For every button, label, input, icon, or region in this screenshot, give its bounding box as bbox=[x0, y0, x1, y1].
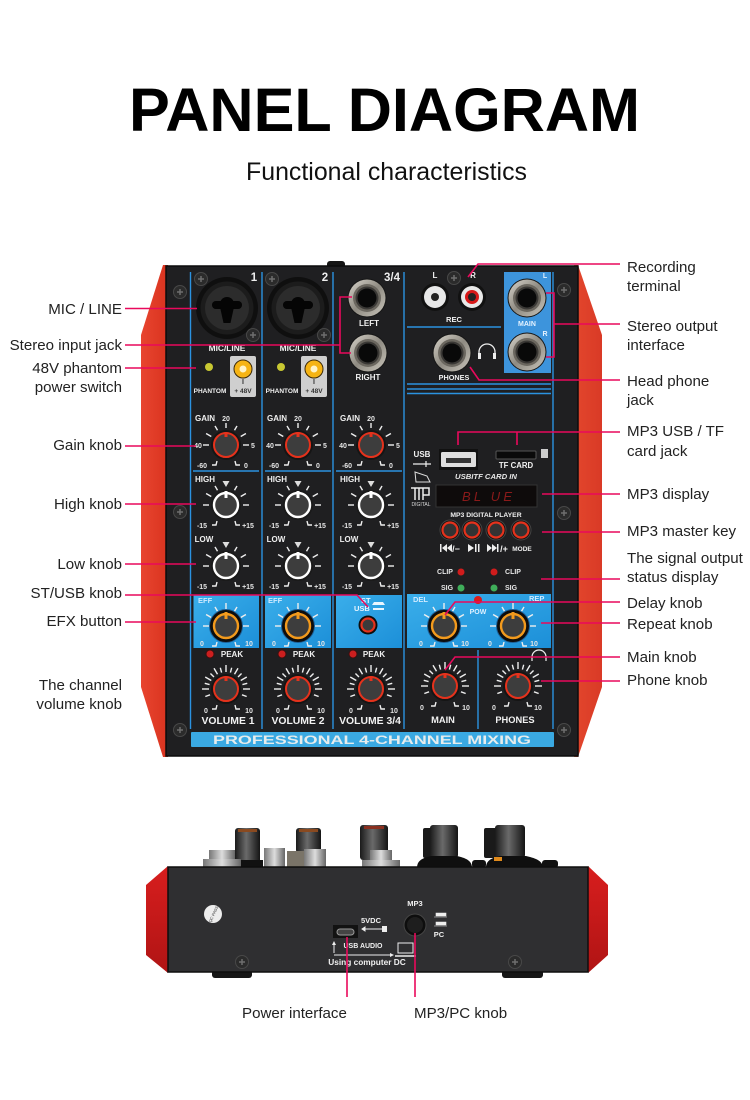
gain knob 3/4: 40 bbox=[339, 443, 347, 450]
channel numbers bbox=[251, 272, 401, 284]
low knob 3/4: LOW bbox=[340, 535, 359, 544]
callout: Phone knob: Phone knob bbox=[627, 672, 708, 689]
phantom power channel 1: I bbox=[242, 379, 244, 386]
callout: Recording terminal: Recording bbox=[627, 259, 696, 276]
callout: MP3/PC knob: MP3/PC knob bbox=[414, 1005, 507, 1022]
ST/USB panel: ST bbox=[361, 596, 371, 605]
EFF panel 1 bbox=[194, 595, 259, 648]
callout: Main knob: Main knob bbox=[627, 649, 697, 666]
callout: channel volume knob: volume knob bbox=[36, 696, 122, 713]
callout: channel volume knob bbox=[36, 677, 122, 713]
volume knob 1: 10 bbox=[245, 708, 253, 715]
callout: Recording terminal: terminal bbox=[627, 278, 681, 295]
callout: Head phone jack: jack bbox=[626, 392, 654, 409]
callout: MP3 display: MP3 display bbox=[627, 486, 710, 503]
volume labels bbox=[201, 715, 535, 727]
MP3 player keys: MODE bbox=[512, 546, 532, 553]
callout: Power interface: Power interface bbox=[242, 1005, 347, 1022]
high knob 1: -15 bbox=[197, 523, 207, 530]
main output panel: MAIN bbox=[518, 321, 536, 328]
delay and repeat panel bbox=[407, 594, 551, 648]
volume labels: VOLUME 3/4 bbox=[339, 716, 401, 727]
volume knob 1 bbox=[202, 665, 253, 715]
EFF panel 2: 0 bbox=[272, 641, 276, 648]
micro USB port bbox=[333, 925, 358, 938]
callout: signal output status display: The signal output bbox=[627, 550, 744, 567]
callout: High knob: High knob bbox=[54, 496, 122, 513]
callout: Stereo output interface bbox=[546, 293, 718, 357]
EFF panel 1: EFF bbox=[198, 596, 213, 605]
gain knob 2: 0 bbox=[316, 463, 320, 470]
MP3 player keys: /− bbox=[452, 544, 460, 554]
EFF panel 1: 10 bbox=[245, 641, 253, 648]
rear red right cheek bbox=[588, 866, 608, 973]
high knob 2: +15 bbox=[314, 523, 326, 530]
delay and repeat panel: DEL bbox=[413, 595, 428, 604]
EFF panel 2 bbox=[265, 595, 331, 648]
bottom banner bbox=[191, 732, 554, 747]
MP3 digital logo bbox=[411, 488, 431, 508]
peak LEDs and labels: PEAK bbox=[221, 650, 243, 659]
phantom power channel 2 bbox=[266, 356, 327, 397]
phones knob: 10 bbox=[534, 705, 542, 712]
gain knob 2: 5 bbox=[323, 443, 327, 450]
left and right line jacks: RIGHT bbox=[356, 373, 381, 382]
low knob 3/4: -15 bbox=[342, 584, 352, 591]
REC RCA terminals bbox=[421, 271, 486, 324]
main output panel: L bbox=[543, 273, 548, 280]
phones knob: 0 bbox=[492, 705, 496, 712]
callout: Stereo input jack: Stereo input jack bbox=[10, 337, 122, 354]
callout: signal output status display bbox=[541, 550, 744, 586]
high knob 2: -15 bbox=[269, 523, 279, 530]
5VDC marking: 5VDC bbox=[361, 916, 382, 925]
red right side cheek bbox=[574, 265, 602, 757]
high knob 1 bbox=[195, 475, 254, 530]
gain knob 1 bbox=[194, 414, 255, 470]
callout: Main knob bbox=[445, 649, 697, 670]
headphone icon bbox=[532, 650, 546, 661]
rear screws bbox=[236, 956, 522, 968]
computer DC caption: Using computer DC bbox=[328, 957, 406, 967]
left and right line jacks bbox=[348, 278, 388, 382]
callout: signal output status display: status display bbox=[627, 569, 719, 586]
USB audio marking bbox=[332, 941, 416, 957]
phantom power channel 2: PHANTOM bbox=[266, 388, 298, 395]
volume knob 2: 10 bbox=[317, 708, 325, 715]
high knob 3/4: +15 bbox=[387, 523, 399, 530]
mixer top panel bbox=[141, 261, 602, 757]
callout: MP3 USB / TF card jack: card jack bbox=[627, 443, 688, 460]
phantom power channel 2: I bbox=[313, 379, 315, 386]
low knob 1 bbox=[195, 535, 254, 591]
REC RCA terminals: R bbox=[470, 271, 476, 280]
MP3 player keys bbox=[440, 512, 532, 554]
gain knob 1: -60 bbox=[197, 463, 207, 470]
callout: Gain knob: Gain knob bbox=[53, 437, 122, 454]
gain knob 3/4: GAIN bbox=[340, 414, 360, 423]
delay and repeat panel: 10 bbox=[461, 641, 469, 648]
clip and signal LEDs: CLIP bbox=[437, 569, 453, 576]
ST/USB panel bbox=[336, 595, 402, 648]
callout: MP3 master key: MP3 master key bbox=[627, 523, 736, 540]
low knob 2: -15 bbox=[269, 584, 279, 591]
rear feet bbox=[212, 970, 543, 978]
callout: MP3/PC knob bbox=[414, 933, 507, 1022]
callout: ST/USB knob bbox=[31, 585, 368, 607]
volume labels: MAIN bbox=[431, 715, 455, 725]
delay and repeat panel: POW bbox=[470, 609, 487, 616]
MP3 display bbox=[436, 485, 537, 507]
QC sticker: QC PASS bbox=[207, 905, 220, 923]
rear black body bbox=[168, 867, 588, 972]
gain knob 2 bbox=[266, 414, 327, 470]
volume knob 1: 0 bbox=[204, 708, 208, 715]
volume knob 3/4 bbox=[347, 665, 398, 715]
delay and repeat panel: 0 bbox=[419, 641, 423, 648]
low knob 1: -15 bbox=[197, 584, 207, 591]
callout: Stereo input jack bbox=[10, 297, 352, 354]
MP3/PC switch bbox=[404, 899, 447, 939]
volume labels: VOLUME 2 bbox=[271, 716, 325, 727]
low knob 1: +15 bbox=[242, 584, 254, 591]
MP3 display: BL UE bbox=[462, 489, 512, 504]
EFF panel 2: 10 bbox=[317, 641, 325, 648]
USB port bbox=[413, 449, 478, 482]
high knob 3/4: HIGH bbox=[340, 475, 360, 484]
gain knob 2: -60 bbox=[269, 463, 279, 470]
REC RCA terminals: L bbox=[433, 271, 438, 280]
clip and signal LEDs: SIG bbox=[441, 585, 454, 592]
high knob 3/4 bbox=[340, 475, 399, 530]
high knob 1: HIGH bbox=[195, 475, 215, 484]
callout: MP3 USB / TF card jack: MP3 USB / TF bbox=[627, 423, 724, 440]
gain knob 2: 20 bbox=[294, 416, 302, 423]
gain knob 1: 20 bbox=[222, 416, 230, 423]
clip and signal LEDs bbox=[437, 568, 521, 592]
low knob 1: LOW bbox=[195, 535, 214, 544]
EFF panel 1: 0 bbox=[200, 641, 204, 648]
phantom power channel 2: + 48V bbox=[305, 388, 323, 395]
gain knob 3/4 bbox=[339, 414, 400, 470]
main output panel: R bbox=[542, 331, 548, 338]
volume knob 2: 0 bbox=[276, 708, 280, 715]
USB audio marking: USB AUDIO bbox=[343, 943, 383, 950]
callout: Stereo output interface: Stereo output bbox=[627, 318, 718, 335]
gain knob 3/4: 5 bbox=[396, 443, 400, 450]
callout: Recording terminal bbox=[468, 259, 696, 295]
rear red left cheek bbox=[146, 866, 168, 973]
top connector bump bbox=[327, 261, 345, 268]
gain knob 3/4: 0 bbox=[389, 463, 393, 470]
XLR jack 2 bbox=[266, 272, 330, 342]
MP3/PC switch: MP3 bbox=[407, 899, 423, 908]
MP3/PC switch: PC bbox=[434, 930, 445, 939]
phones knob bbox=[492, 662, 542, 712]
5VDC marking bbox=[361, 916, 387, 932]
gain knob 3/4: 20 bbox=[367, 416, 375, 423]
gain knob 2: GAIN bbox=[267, 414, 287, 423]
callout: MP3 USB / TF card jack bbox=[458, 423, 724, 460]
phantom power channel 1: PHANTOM bbox=[194, 388, 226, 395]
low knob 3/4: +15 bbox=[387, 584, 399, 591]
blue channel dividers bbox=[190, 272, 553, 729]
MP3 player keys: MP3 DIGITAL PLAYER bbox=[450, 512, 522, 519]
gain knob 1: 40 bbox=[194, 443, 202, 450]
main knob: 10 bbox=[462, 705, 470, 712]
volume knob 2 bbox=[274, 665, 325, 715]
volume knob 3/4: 10 bbox=[390, 708, 398, 715]
channel numbers: 3/4 bbox=[384, 272, 401, 284]
red left side cheek bbox=[141, 265, 168, 757]
high knob 2 bbox=[267, 475, 326, 530]
callout: EFX button: EFX button bbox=[46, 613, 122, 630]
volume labels: PHONES bbox=[495, 715, 535, 725]
callout: Power interface bbox=[242, 937, 347, 1022]
bottom banner: PROFESSIONAL 4-CHANNEL MIXING bbox=[213, 733, 531, 747]
low knob 3/4 bbox=[340, 535, 399, 591]
callout: MIC / LINE: MIC / LINE bbox=[48, 301, 122, 318]
clip and signal LEDs: SIG bbox=[505, 585, 518, 592]
USB/TF caption: USBITF CARD IN bbox=[455, 472, 517, 481]
MIC/LINE labels: MIC/LINE bbox=[209, 343, 246, 353]
TF card slot bbox=[496, 449, 548, 470]
callout: 48V phantom power switch: 48V phantom bbox=[32, 360, 122, 377]
peak LEDs and labels bbox=[206, 650, 385, 659]
MP3 digital logo: DIGITAL bbox=[411, 502, 431, 508]
gain knob 1: 0 bbox=[244, 463, 248, 470]
MIC/LINE labels bbox=[209, 343, 317, 353]
title: PANEL DIAGRAM bbox=[129, 76, 640, 144]
ST/USB panel: USB bbox=[354, 604, 370, 613]
callout: Low knob: Low knob bbox=[57, 556, 122, 573]
corner screws bbox=[174, 284, 570, 736]
QC sticker bbox=[204, 905, 222, 923]
delay and repeat panel: 0 bbox=[488, 641, 492, 648]
MIC/LINE labels: MIC/LINE bbox=[280, 343, 317, 353]
low knob 2: +15 bbox=[314, 584, 326, 591]
channel numbers: 2 bbox=[322, 272, 328, 284]
gain knob 2: 40 bbox=[266, 443, 274, 450]
gain knob 3/4: -60 bbox=[342, 463, 352, 470]
callout: Low knob bbox=[57, 556, 196, 573]
callout: 48V phantom power switch bbox=[32, 360, 196, 396]
peak LEDs and labels: PEAK bbox=[363, 650, 385, 659]
XLR jack 1 bbox=[194, 272, 260, 342]
callout: channel volume knob: The channel bbox=[39, 677, 122, 694]
callout: 48V phantom power switch: power switch bbox=[35, 379, 122, 396]
callout: ST/USB knob: ST/USB knob bbox=[31, 585, 122, 602]
gain knob 1: GAIN bbox=[195, 414, 215, 423]
EFF panel 2: EFF bbox=[268, 596, 283, 605]
volume knob 3/4: 0 bbox=[349, 708, 353, 715]
main knob bbox=[420, 662, 470, 712]
low knob 2 bbox=[267, 535, 326, 591]
high knob 1: +15 bbox=[242, 523, 254, 530]
MP3 player keys: /+ bbox=[500, 544, 508, 554]
TF card slot: TF CARD bbox=[499, 461, 533, 470]
subtitle: Functional characteristics bbox=[246, 158, 527, 186]
clip and signal LEDs: CLIP bbox=[505, 569, 521, 576]
left and right line jacks: LEFT bbox=[359, 319, 379, 328]
phones jack bbox=[432, 334, 496, 382]
peak LEDs and labels: PEAK bbox=[293, 650, 315, 659]
phantom power channel 1: + 48V bbox=[234, 388, 252, 395]
high knob 2: HIGH bbox=[267, 475, 287, 484]
phantom power channel 1 bbox=[194, 356, 256, 397]
callout: Head phone jack bbox=[470, 367, 709, 409]
volume labels: VOLUME 1 bbox=[201, 716, 255, 727]
delay and repeat panel: 10 bbox=[530, 641, 538, 648]
phones jack: PHONES bbox=[439, 373, 470, 382]
callout: Repeat knob: Repeat knob bbox=[627, 616, 713, 633]
callout: Head phone jack: Head phone bbox=[627, 373, 709, 390]
USB port: USB bbox=[414, 450, 431, 459]
main knob: 0 bbox=[420, 705, 424, 712]
rear top knobs and jacks bbox=[203, 825, 558, 868]
callout: Stereo output interface: interface bbox=[627, 337, 685, 354]
main output panel bbox=[504, 272, 551, 373]
mixer rear view bbox=[146, 825, 608, 978]
low knob 2: LOW bbox=[267, 535, 286, 544]
callout: Delay knob: Delay knob bbox=[627, 595, 703, 612]
channel numbers: 1 bbox=[251, 272, 258, 284]
high knob 3/4: -15 bbox=[342, 523, 352, 530]
black faceplate bbox=[166, 266, 578, 756]
gain knob 1: 5 bbox=[251, 443, 255, 450]
callout: Delay knob bbox=[445, 595, 703, 615]
REC RCA terminals: REC bbox=[446, 315, 463, 324]
delay and repeat panel: REP bbox=[529, 594, 544, 603]
